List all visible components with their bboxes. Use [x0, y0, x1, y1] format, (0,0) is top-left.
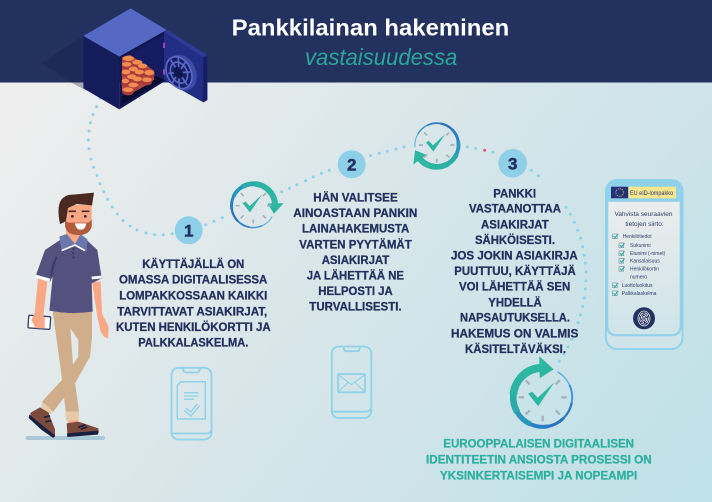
- icon: clock 1: [222, 175, 284, 237]
- dotted path: [87, 96, 588, 363]
- text: step 1: TARVITTAVAT ASIAKIRJAT,: [117, 305, 267, 318]
- icon: fingerprint: [633, 307, 655, 329]
- text: step 3: PUUTTUU, KÄYTTÄJÄ: [454, 265, 576, 278]
- text: step 1: [116, 258, 271, 350]
- text: conclusion: IDENTITEETIN ANSIOSTA PROSESSI ON: [426, 454, 652, 467]
- step 3 number: 3: [508, 154, 517, 174]
- text: step 1: OMASSA DIGITAALISESSA: [119, 274, 268, 287]
- phone in hand: [28, 315, 51, 329]
- text: step 2: JA LÄHETTÄÄ NE: [307, 270, 404, 282]
- panel: EU eID wallet phone: [606, 180, 682, 349]
- icon: clock 3: [501, 356, 584, 439]
- icon: phone with envelope: [332, 346, 371, 418]
- text: conclusion: YKSINKERTAISEMPI JA NOPEAMPI: [440, 469, 637, 482]
- cuffs and ankles: [41, 402, 79, 425]
- wallet checklist: Henkilötiedot: [623, 234, 652, 240]
- character: man with phone: [26, 193, 109, 440]
- step 1 number: [175, 216, 203, 244]
- text: conclusion: [426, 438, 652, 482]
- icon: clock 2: [394, 102, 480, 188]
- wallet prompt: Vahvista seuraavien: [614, 211, 673, 218]
- text: step 3: PANKKI: [493, 187, 536, 200]
- text: step 3: YHDELLÄ: [488, 296, 542, 309]
- wallet checklist: Henkilökortin: [630, 267, 659, 273]
- icon: EU flag: [611, 187, 628, 198]
- title: Pankkilainan hakeminen: [232, 15, 509, 41]
- head: [58, 193, 94, 235]
- text: step 3: HAKEMUS ON VALMIS: [451, 327, 579, 340]
- header band: [0, 0, 712, 82]
- text: step 2: TURVALLISESTI.: [309, 300, 402, 314]
- text: step 3: JOS JOKIN ASIAKIRJA: [451, 249, 578, 262]
- text: step 1: PALKKALASKELMA.: [138, 337, 248, 350]
- text: step 3: VOI LÄHETTÄÄ SEN: [459, 281, 570, 294]
- wallet checklist: numero: [630, 275, 647, 281]
- wallet prompt: tietojen siirto:: [625, 221, 664, 228]
- text: step 1: KÄYTTÄJÄLLÄ ON: [142, 258, 244, 271]
- text: step 2: LAINAHAKEMUSTA: [302, 223, 410, 236]
- text: step 3: SÄHKÖISESTI.: [475, 234, 555, 247]
- wallet checklist: [612, 234, 666, 297]
- text: step 2: [293, 192, 417, 314]
- text: step 3: NAPSAUTUKSELLA.: [460, 312, 570, 325]
- wallet label: [628, 187, 676, 198]
- wallet label: EU eID-lompakko: [630, 191, 674, 197]
- step 3 number: [498, 149, 527, 178]
- door: [161, 30, 207, 102]
- text: step 1: KUTEN HENKILÖKORTTI JA: [116, 321, 271, 334]
- text: step 2: HELPOSTI JA: [318, 285, 393, 298]
- step 1 number: 1: [184, 222, 193, 240]
- text: step 3: ASIAKIRJAT: [481, 218, 549, 231]
- subtitle: vastaisuudessa: [305, 44, 457, 70]
- step 2 number: [338, 150, 366, 178]
- text: conclusion: EUROOPPALAISEN DIGITAALISEN: [443, 438, 634, 451]
- text: step 2: HÄN VALITSEE: [313, 192, 398, 204]
- icon: open safe with coins: [83, 8, 207, 109]
- text: step 2: ASIAKIRJAT: [322, 254, 389, 267]
- text: step 3: KÄSITELTÄVÄKSI.: [465, 343, 566, 356]
- wallet prompt: [614, 211, 673, 228]
- wallet checklist: Palkkalaskelma: [622, 291, 657, 297]
- arms: [31, 279, 109, 338]
- wallet checklist: Sukunimi: [630, 243, 651, 249]
- text: step 2: VARTEN PYYTÄMÄT: [299, 238, 412, 251]
- wallet checklist: Luottoluokitus: [622, 283, 653, 289]
- trousers: [42, 312, 92, 412]
- shirt: [36, 240, 102, 313]
- text: step 3: VASTAANOTTAA: [469, 203, 562, 216]
- safe shadow: [42, 36, 83, 89]
- text: step 3: [451, 187, 579, 356]
- collar: [59, 234, 87, 252]
- wallet checklist: Etunimi (-nimet): [630, 251, 666, 257]
- text: step 1: LOMPAKKOSSAAN KAIKKI: [119, 290, 267, 303]
- step 2 number: 2: [347, 156, 356, 174]
- shoes: [29, 407, 99, 438]
- icon: phone with document: [172, 368, 212, 440]
- coins: [121, 55, 155, 95]
- text: step 2: AINOASTAAN PANKIN: [293, 207, 417, 220]
- ground shadow: [26, 436, 105, 440]
- wallet checklist: Kansalaisuus: [630, 259, 660, 265]
- neck: [66, 230, 81, 244]
